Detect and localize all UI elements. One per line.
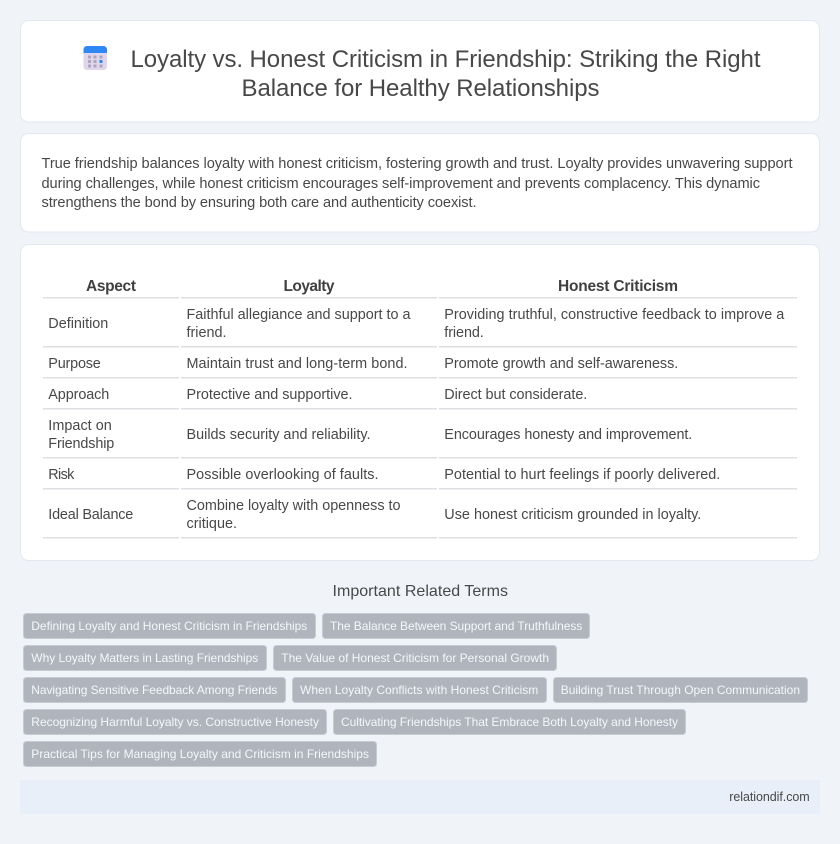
row: purpose: Maintain trust and long-term bond.	[186, 356, 408, 372]
row: definition	[48, 307, 784, 341]
table header: Aspect	[86, 278, 136, 295]
table header	[86, 278, 678, 295]
panel: comparison table	[20, 244, 820, 560]
related terms chips	[24, 614, 808, 766]
footer	[20, 780, 820, 814]
row: approach	[48, 387, 587, 403]
row: definition: Definition	[48, 316, 108, 332]
chip	[554, 678, 808, 702]
row: approach: Protective and supportive.	[186, 387, 352, 403]
chip	[24, 646, 266, 670]
table header: Honest Criticism	[558, 278, 678, 295]
row: approach: Approach	[48, 387, 109, 403]
row: impact on friendship: Builds security and reliability.	[186, 427, 370, 443]
row: impact on friendship: Encourages honesty and improvement.	[444, 427, 692, 443]
row: risk	[48, 467, 720, 483]
chip	[24, 678, 286, 702]
row: ideal balance: Use honest criticism grounded in loyalty.	[444, 507, 701, 523]
row: ideal balance	[48, 498, 701, 532]
footer: relationdif.com	[729, 790, 810, 804]
row: definition: friend.	[444, 325, 484, 341]
chip	[334, 710, 686, 734]
chip	[292, 678, 546, 702]
chip	[322, 614, 590, 638]
chip	[24, 742, 376, 766]
chip: Building Trust Through Open Communication	[561, 683, 800, 697]
icon: calendar	[84, 46, 107, 70]
row: definition: friend.	[186, 325, 226, 341]
chip: Defining Loyalty and Honest Criticism in Friendships	[31, 619, 307, 633]
chip: Cultivating Friendships That Embrace Both Loyalty and Honesty	[341, 715, 678, 729]
row: risk: Potential to hurt feelings if poorly delivered.	[444, 467, 720, 483]
chip: The Balance Between Support and Truthfulness	[330, 619, 582, 633]
row: impact on friendship	[48, 418, 692, 452]
panel: introduction	[20, 134, 820, 232]
row: ideal balance: critique.	[186, 516, 237, 532]
table header: Loyalty	[284, 278, 335, 295]
row: ideal balance: Combine loyalty with openness to	[186, 498, 400, 514]
chip: Recognizing Harmful Loyalty vs. Constructive Honesty	[31, 715, 319, 729]
row: approach: Direct but considerate.	[444, 387, 587, 403]
row: risk: Risk	[48, 467, 75, 483]
title	[130, 46, 761, 102]
row: definition: Providing truthful, constructive feedback to improve a	[444, 307, 784, 323]
chip: The Value of Honest Criticism for Personal Growth	[281, 651, 549, 665]
text block: introduction: True friendship balances loyalty with honest criticism, fostering growth and trust. Loyalty provides unwavering support	[42, 156, 792, 172]
text block: introduction	[42, 156, 792, 211]
chip: When Loyalty Conflicts with Honest Criticism	[300, 683, 538, 697]
title: Balance for Healthy Relationships	[242, 75, 600, 102]
row: impact on friendship: Impact on	[48, 418, 112, 434]
title: Loyalty vs. Honest Criticism in Friendship: Striking the Right	[130, 46, 761, 73]
chip	[24, 614, 316, 638]
row: ideal balance: Ideal Balance	[48, 507, 133, 523]
row: risk: Possible overlooking of faults.	[186, 467, 378, 483]
chip	[24, 710, 326, 734]
row: purpose: Promote growth and self-awareness.	[444, 356, 678, 372]
heading: important related terms: Important Related Terms	[332, 583, 508, 600]
chip: Practical Tips for Managing Loyalty and Criticism in Friendships	[31, 747, 369, 761]
text block: introduction: during challenges, while honest criticism encourages self-improvement and prevents complacency. This dynamic	[42, 176, 760, 192]
panel: header	[20, 20, 820, 122]
chip: Why Loyalty Matters in Lasting Friendships	[31, 651, 258, 665]
chip: Navigating Sensitive Feedback Among Friends	[31, 683, 277, 697]
row: impact on friendship: Friendship	[48, 436, 114, 452]
text block: introduction: strengthens the bond by ensuring both care and authenticity coexist.	[42, 195, 476, 211]
row: purpose	[48, 356, 678, 372]
chip	[274, 646, 556, 670]
row: definition: Faithful allegiance and support to a	[186, 307, 410, 323]
row: purpose: Purpose	[48, 356, 101, 372]
